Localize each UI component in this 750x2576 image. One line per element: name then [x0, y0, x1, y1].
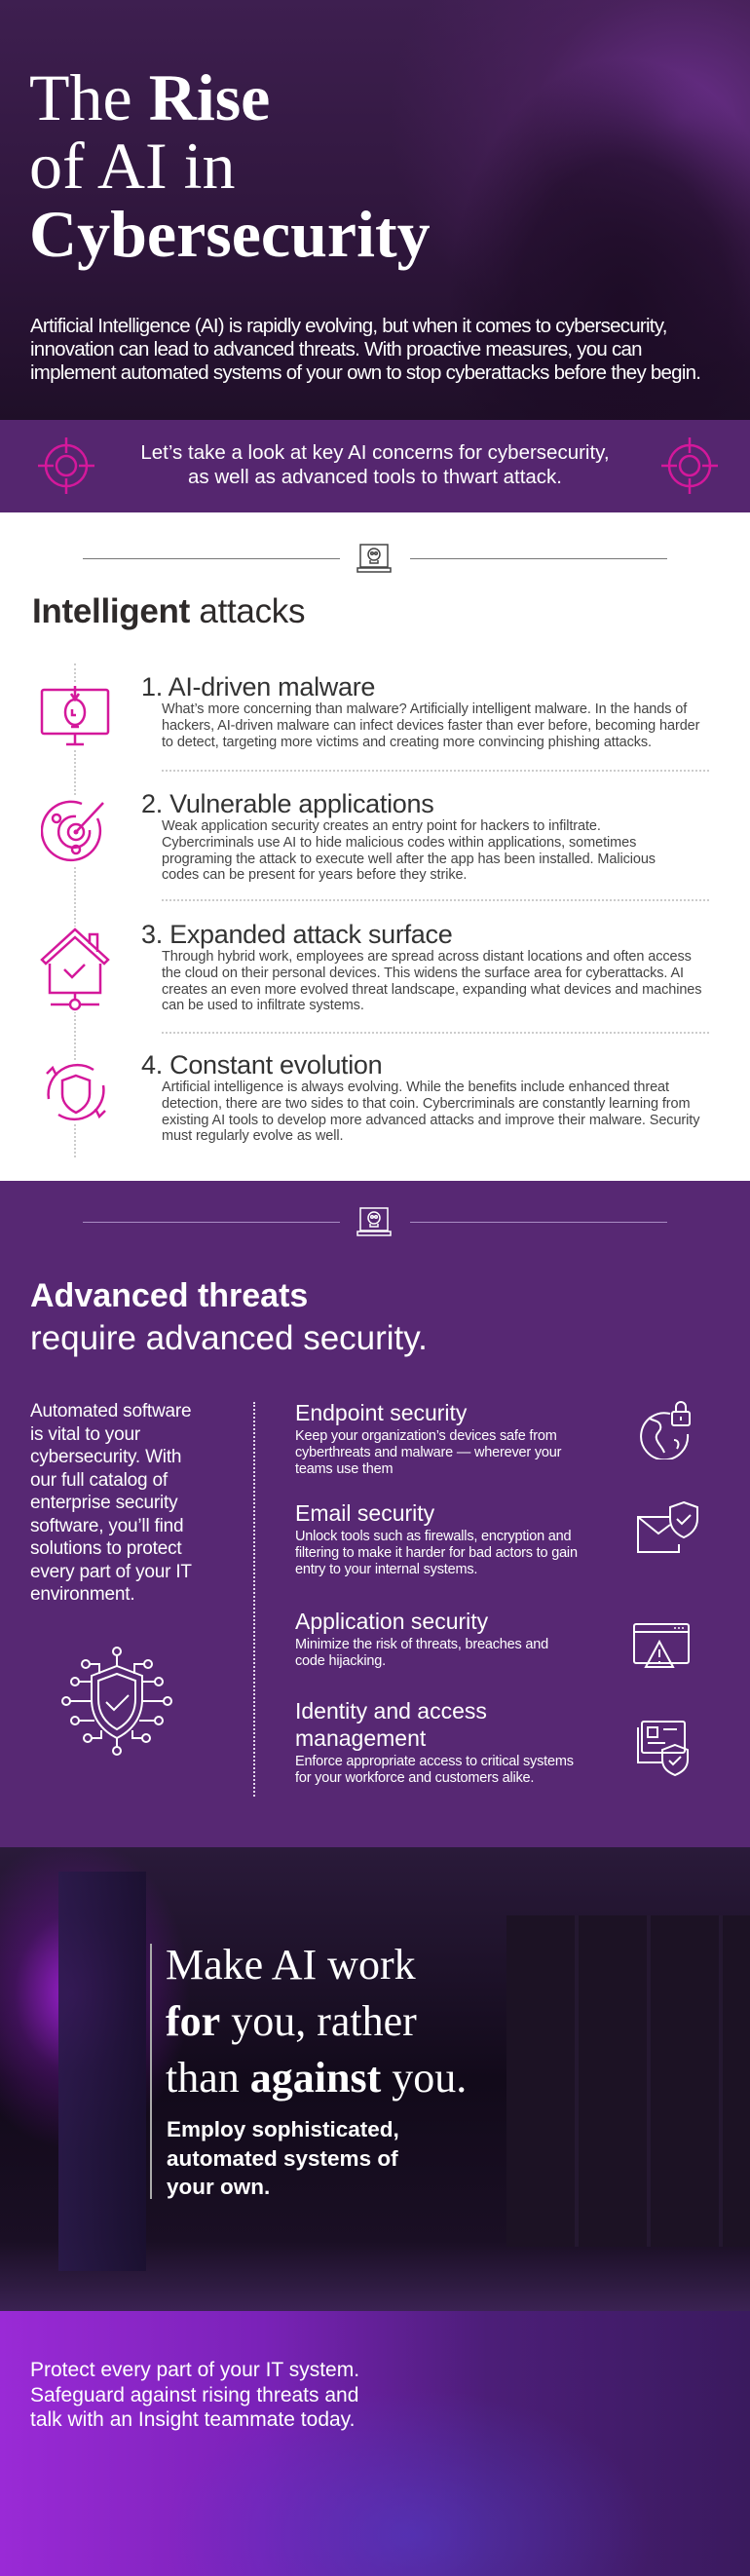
item: email security: Email security — [295, 1500, 434, 1526]
left paragraph: our full catalog of — [30, 1469, 168, 1491]
item 4: 4. Constant evolution — [141, 1050, 382, 1080]
banner — [0, 420, 750, 512]
left paragraph: is vital to your — [30, 1424, 140, 1444]
item: identity and access management: Identity and access — [295, 1698, 487, 1724]
icon: target right — [661, 437, 718, 494]
icon: window warning — [633, 1623, 690, 1668]
intro paragraph: implement automated systems of your own to stop cyberattacks before they begin. — [30, 361, 700, 384]
item 3: Through hybrid work, employees are spread across distant locations and often access — [162, 949, 692, 965]
purple section: advanced threats — [0, 1181, 750, 1847]
item: email security: Unlock tools such as firewalls, encryption and — [295, 1529, 571, 1544]
headline: than against you. — [166, 2054, 467, 2102]
left paragraph — [30, 1401, 192, 1605]
item: endpoint security: Endpoint security — [295, 1400, 467, 1425]
icon: target left — [38, 437, 94, 494]
title: The Rise — [29, 60, 270, 134]
subhead: Employ sophisticated, — [167, 2117, 399, 2141]
item 3: the cloud on their personal devices. This widens the surface area for cyberattacks. AI — [162, 966, 684, 981]
icon: shield refresh — [41, 1060, 111, 1124]
item 1: 1. AI-driven malware — [141, 672, 375, 701]
server racks — [58, 1872, 146, 2271]
title: Cybersecurity — [29, 197, 431, 271]
item: application security: Minimize the risk of threats, breaches and — [295, 1637, 548, 1652]
item 3 — [141, 920, 701, 1013]
banner text — [140, 441, 610, 488]
headline: for you, rather — [166, 1997, 417, 2045]
intro paragraph — [30, 315, 700, 384]
closing text — [30, 2359, 359, 2431]
title — [29, 60, 431, 271]
heading: advanced threats: Advanced threats — [30, 1277, 308, 1314]
title: of AI in — [29, 129, 236, 203]
closing section — [0, 2311, 750, 2576]
headline — [166, 1941, 467, 2102]
left paragraph: solutions to protect — [30, 1538, 181, 1559]
item: identity and access management — [295, 1698, 574, 1786]
subhead: automated systems of — [167, 2145, 398, 2171]
divider with laptop icon — [83, 1207, 667, 1236]
left paragraph: software, you’ll find — [30, 1516, 183, 1535]
item: application security — [295, 1609, 548, 1669]
item: email security: entry to your internal systems. — [295, 1562, 477, 1577]
item 2: 2. Vulnerable applications — [141, 789, 433, 818]
item 3: creates an even more evolved threat landscape, expanding what devices and machines — [162, 982, 701, 998]
banner text: Let’s take a look at key AI concerns for cybersecurity, — [140, 441, 610, 464]
icon: circuit shield — [61, 1647, 172, 1756]
item 1: to detect, targeting more victims and creating more convincing phishing attacks. — [162, 735, 652, 750]
divider with laptop icon (white section) — [83, 544, 667, 573]
intro paragraph: innovation can lead to advanced threats. With proactive measures, you can — [30, 338, 642, 360]
item 2 — [141, 789, 656, 883]
item 4: detection, there are two sides to that coin. Cybercriminals are constantly learning from — [162, 1096, 690, 1112]
item: identity and access management: management — [295, 1725, 426, 1751]
hero section — [0, 0, 750, 420]
hero silhouette — [409, 19, 750, 420]
subhead — [167, 2117, 399, 2199]
item 2: Cybercriminals use AI to hide malicious codes within applications, sometimes — [162, 835, 636, 851]
left paragraph: every part of your IT — [30, 1561, 192, 1582]
dotted vertical divider — [253, 1402, 255, 1797]
heading: advanced threats — [30, 1277, 428, 1357]
item 2: codes can be present for years before they strike. — [162, 867, 467, 883]
item: application security: Application security — [295, 1609, 488, 1634]
left paragraph: enterprise security — [30, 1493, 177, 1513]
icon: globe lock — [640, 1401, 691, 1459]
item 4: existing AI tools to develop more advanced attacks and improve their malware. Security — [162, 1113, 699, 1128]
icon: radar — [41, 797, 111, 867]
item 4: Artificial intelligence is always evolving. While the benefits include enhanced threat — [162, 1080, 669, 1095]
heading: advanced threats: require advanced security. — [30, 1319, 428, 1357]
icon: house — [39, 927, 111, 1012]
icon: id card shield — [637, 1721, 689, 1776]
item: identity and access management: Enforce appropriate access to critical systems — [295, 1754, 574, 1769]
headline: Make AI work — [166, 1941, 416, 1989]
left paragraph: environment. — [30, 1584, 134, 1605]
server room section — [0, 1847, 750, 2311]
item 2: Weak application security creates an entry point for hackers to infiltrate. — [162, 818, 601, 834]
item 1: What’s more concerning than malware? Artificially intelligent malware. In the hands of — [162, 701, 687, 717]
icon: envelope shield — [637, 1501, 698, 1553]
left paragraph: Automated software — [30, 1401, 191, 1421]
item: endpoint security: Keep your organization’s devices safe from — [295, 1428, 557, 1444]
heading: Intelligent attacks: Intelligent attacks — [32, 592, 305, 630]
icon: monitor bomb — [39, 684, 111, 748]
item 1: hackers, AI-driven malware can infect devices faster than ever before, becoming harder — [162, 718, 699, 734]
icon: laptop skull white — [356, 1207, 392, 1236]
item: endpoint security: cyberthreats and malware — wherever your — [295, 1445, 561, 1460]
left paragraph: cybersecurity. With — [30, 1447, 181, 1467]
item: endpoint security: teams use them — [295, 1461, 393, 1477]
dotted timeline — [74, 663, 76, 1157]
item 4: must regularly evolve as well. — [162, 1128, 343, 1144]
closing text: Protect every part of your IT system. — [30, 2359, 359, 2381]
icon: laptop skull — [356, 544, 392, 573]
banner text: as well as advanced tools to thwart attack. — [188, 466, 562, 488]
item: identity and access management: for your workforce and customers alike. — [295, 1770, 534, 1786]
item 3: can be used to infiltrate systems. — [162, 998, 364, 1013]
item: endpoint security — [295, 1400, 561, 1477]
item: email security — [295, 1500, 578, 1577]
intro paragraph: Artificial Intelligence (AI) is rapidly evolving, but when it comes to cybersecurity, — [30, 315, 667, 337]
item 2: programing the attack to execute well after the app has been installed. Malicious — [162, 852, 656, 867]
item: email security: filtering to make it harder for bad actors to gain — [295, 1545, 578, 1561]
closing text: talk with an Insight teammate today. — [30, 2408, 355, 2431]
subhead: your own. — [167, 2175, 270, 2199]
item 3: 3. Expanded attack surface — [141, 920, 452, 949]
vertical accent line — [150, 1944, 152, 2199]
item: application security: code hijacking. — [295, 1653, 386, 1669]
item 4 — [141, 1050, 699, 1144]
item 1 — [141, 672, 699, 750]
closing text: Safeguard against rising threats and — [30, 2383, 358, 2406]
